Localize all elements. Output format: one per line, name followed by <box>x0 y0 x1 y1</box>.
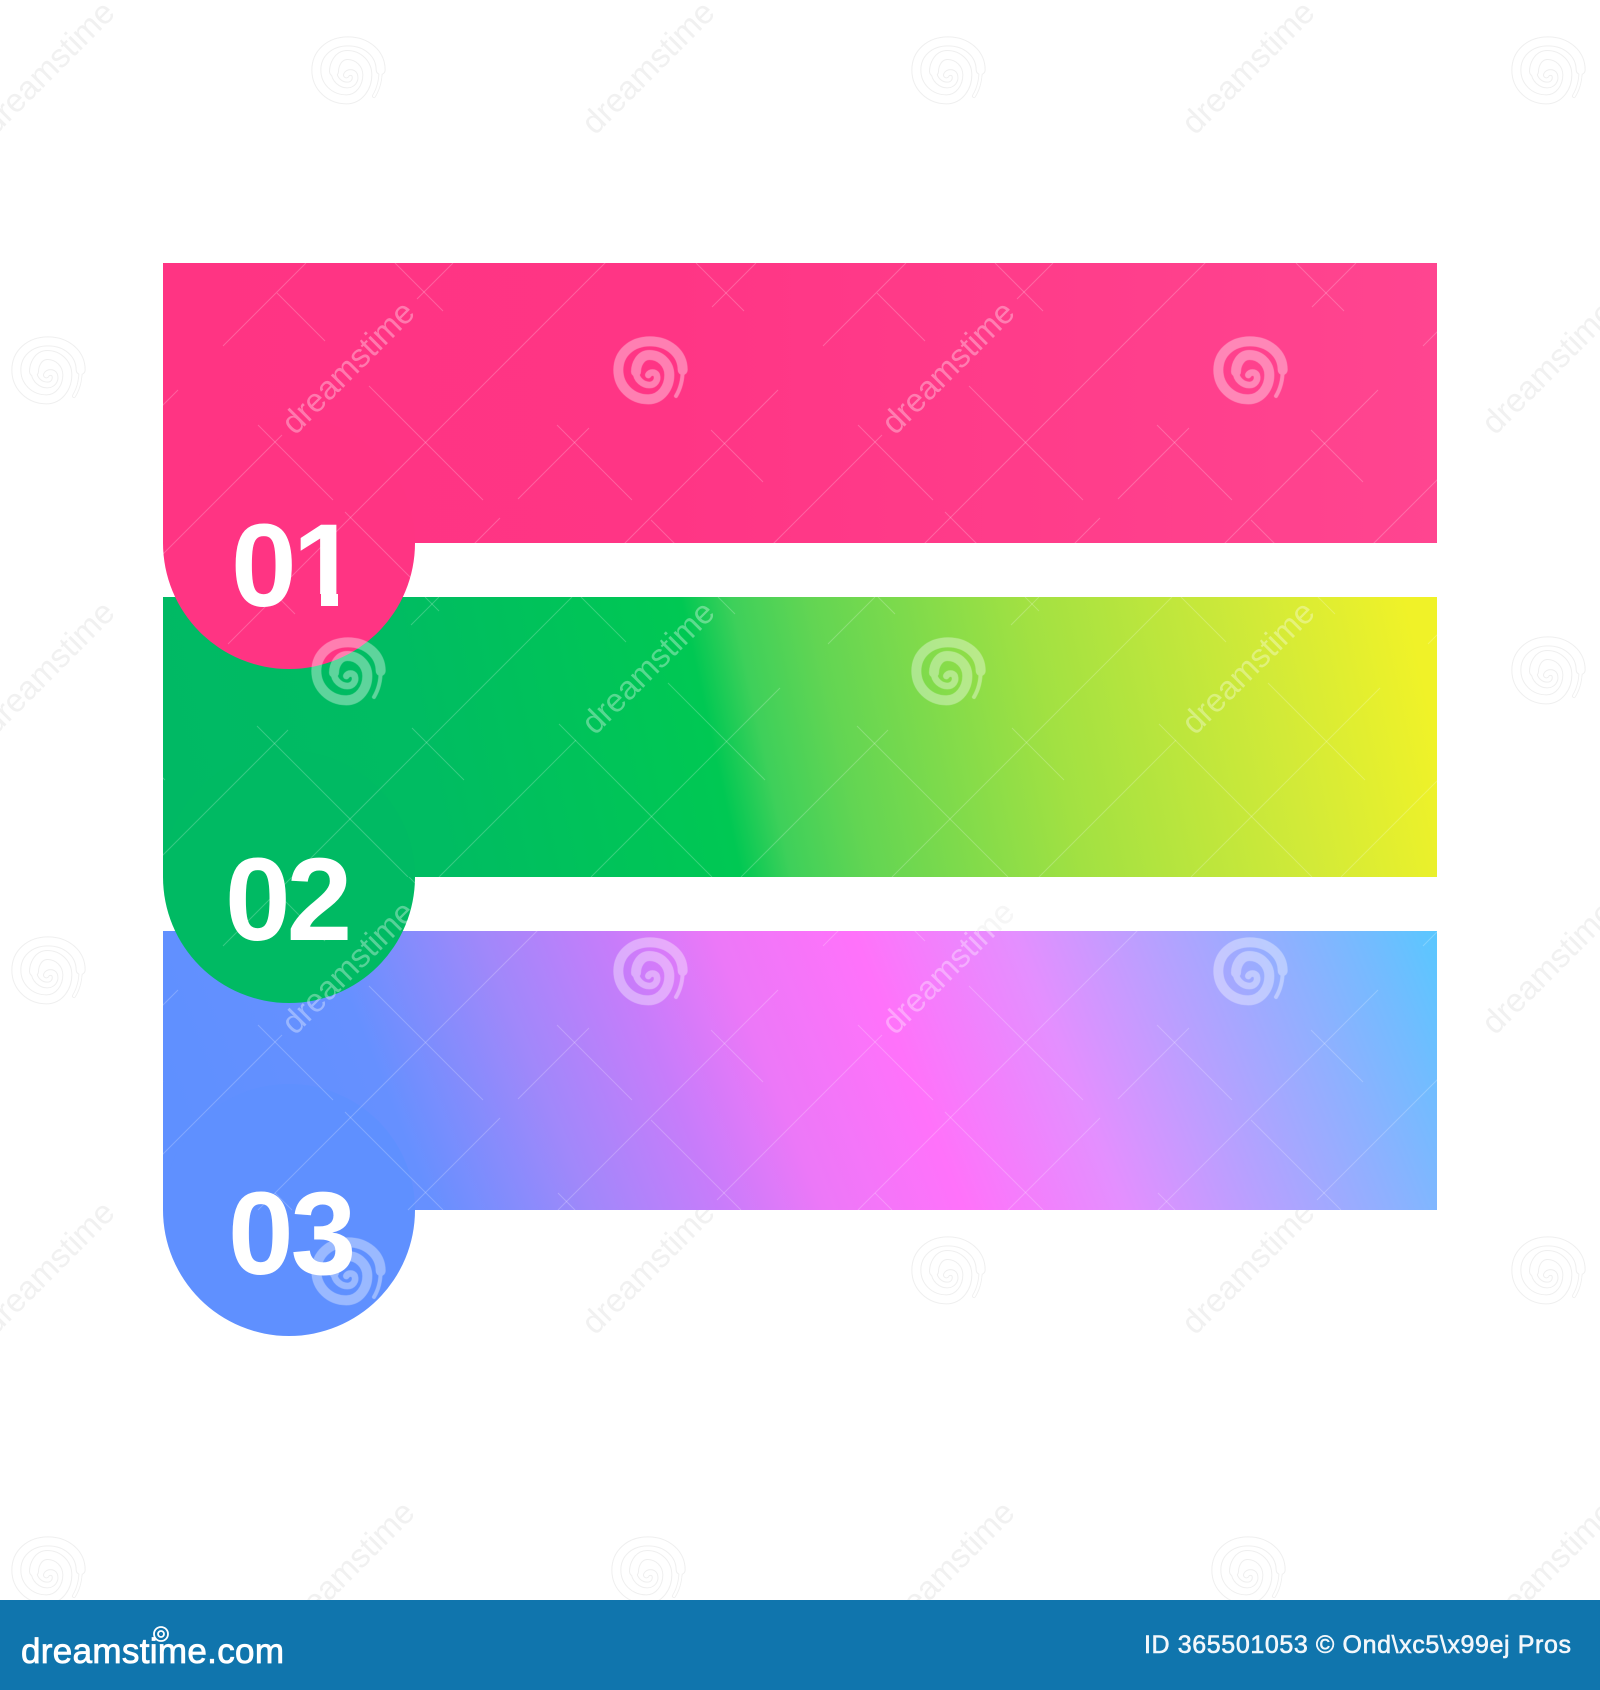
faint watermark on white background: dreamstime <box>574 1193 722 1341</box>
banner 01 bar <box>163 263 1437 543</box>
footer credit text: ID 365501053 © Ond\xc5\x99ej Pros <box>1144 1631 1571 1659</box>
watermark over banners: dreamstime <box>874 293 1022 441</box>
footer bar <box>0 1600 1600 1690</box>
banner 03 tab <box>163 1084 415 1336</box>
watermark over banners <box>274 293 1322 1300</box>
watermark over banners: dreamstime <box>874 893 1022 1041</box>
footer logo spiral <box>154 1627 168 1641</box>
faint watermark on white background: dreamstime <box>874 1493 1022 1641</box>
number 03: 03 <box>228 1168 353 1300</box>
faint watermark on white background: dreamstime <box>874 893 1022 1041</box>
faint watermark on white background: dreamstime <box>1174 1193 1322 1341</box>
watermark over banners: dreamstime <box>274 893 422 1041</box>
watermark over banners: dreamstime <box>574 593 722 741</box>
watermark lines over banners <box>163 263 1437 1210</box>
banner 01 tab <box>163 417 415 669</box>
banner 02 bar <box>163 597 1437 877</box>
faint watermark on white background: dreamstime <box>274 1493 422 1641</box>
panel: banner 01 <box>163 263 1437 669</box>
number 02: 02 <box>225 834 348 966</box>
number 01: 01 <box>231 500 356 632</box>
watermark over banners: dreamstime <box>1174 593 1322 741</box>
panel: banner 02 <box>163 597 1437 1003</box>
watermark over banners: dreamstime <box>274 293 422 441</box>
banner 02 tab <box>163 751 415 1003</box>
banner 03 bar <box>163 931 1437 1210</box>
footer logo text: dreamstime.com <box>21 1632 284 1671</box>
panel: banner 03 <box>163 931 1437 1336</box>
